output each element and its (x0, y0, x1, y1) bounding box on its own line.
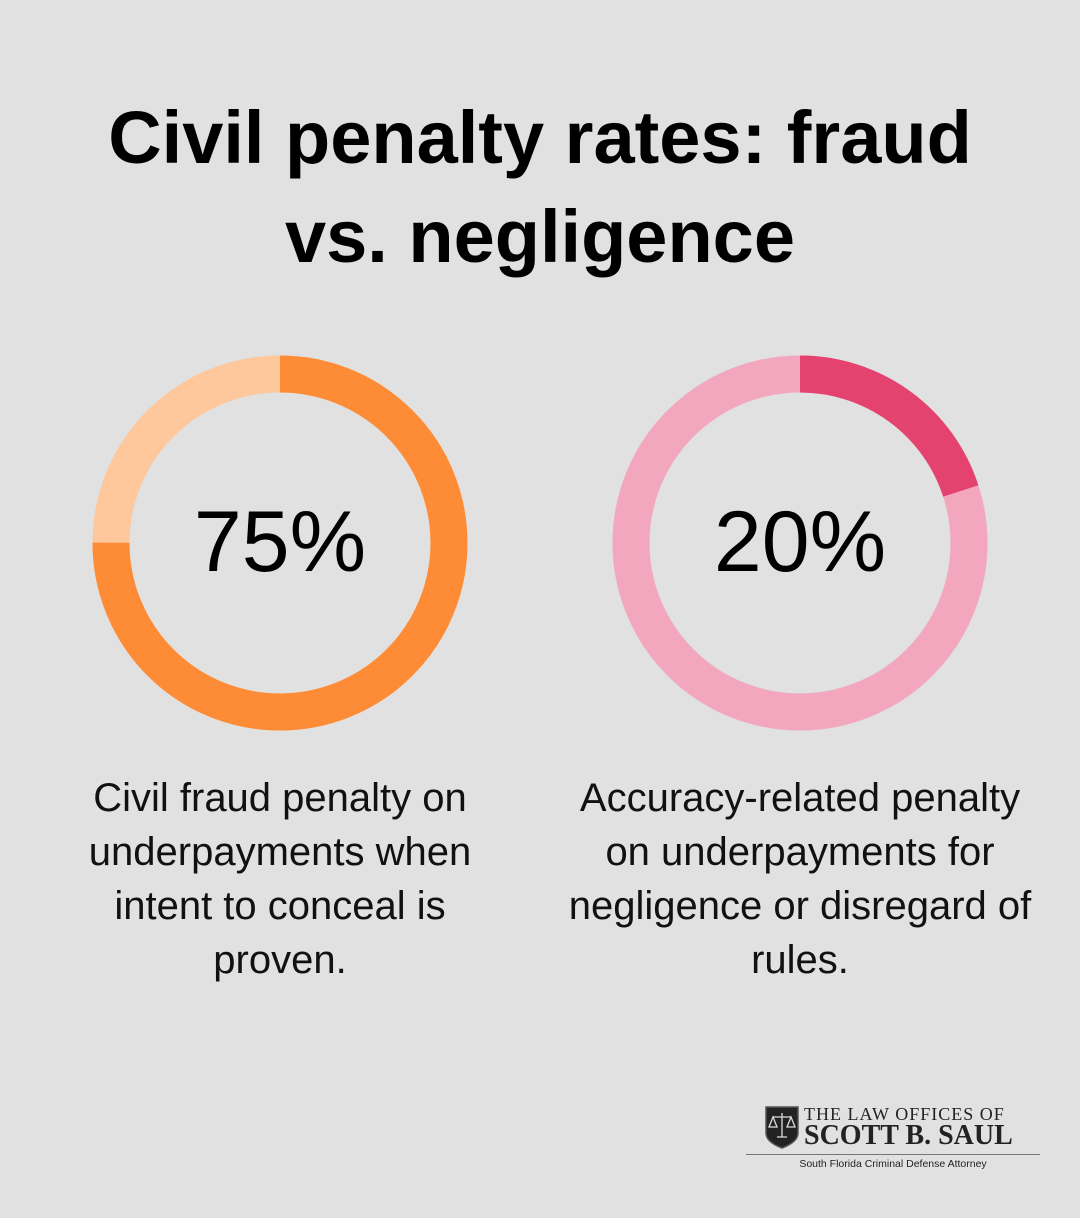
icon: scales shield (765, 1106, 799, 1149)
chart: fraud donut 75% (92, 356, 988, 730)
logo: THE LAW OFFICES OF (804, 1104, 1005, 1124)
logo: SCOTT B. SAUL (804, 1120, 1013, 1151)
logo: South Florida Criminal Defense Attorney (799, 1158, 987, 1170)
chart: negligence donut 20%: 20% (714, 494, 886, 590)
title: Civil penalty rates: fraud (108, 96, 972, 179)
text: fraud description: Civil fraud penalty on underpayments when intent to conceal is proven. (89, 776, 471, 982)
title: vs. negligence (285, 195, 795, 278)
chart: fraud donut 75%: 75% (194, 494, 366, 590)
text: negligence description: Accuracy-related penalty on underpayments for negligence or disregard of rules. (569, 776, 1031, 982)
chart: negligence donut 20% (631, 374, 969, 712)
title (108, 96, 972, 278)
logo (746, 1104, 1040, 1170)
